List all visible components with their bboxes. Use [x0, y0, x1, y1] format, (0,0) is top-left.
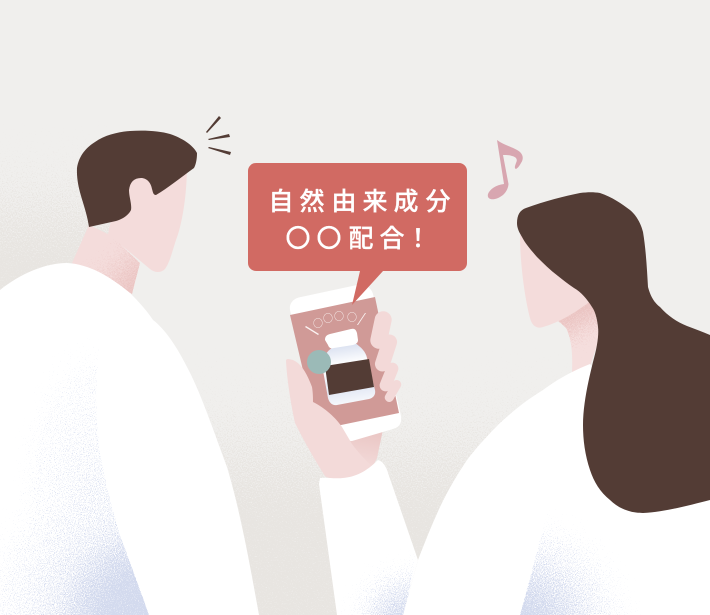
woman neck — [555, 300, 602, 372]
man hair — [77, 131, 197, 227]
hand and phone — [286, 285, 403, 479]
man neck — [72, 225, 140, 294]
woman body — [403, 364, 710, 615]
sleeve shading — [335, 535, 420, 615]
bottle label — [325, 359, 374, 395]
bottle cap — [325, 329, 358, 348]
icon: music note — [488, 140, 523, 199]
bubble text line 1: 自然由来成分 — [268, 188, 451, 216]
man face — [108, 165, 187, 272]
woman hair — [517, 192, 710, 513]
man arm shading: sparse grain — [10, 330, 149, 615]
bubble text line 2: 〇〇配合！ — [285, 225, 431, 253]
speech bubble — [248, 163, 467, 305]
phone body — [290, 285, 401, 441]
thumb and hand — [286, 359, 373, 479]
man arm shading: dense grain — [0, 425, 149, 615]
palm — [340, 425, 384, 470]
woman back shading — [520, 495, 650, 615]
screen heading ○○○○: ○○○○ — [313, 308, 357, 330]
man shoulder and arm — [0, 263, 259, 615]
bubble shape — [248, 163, 467, 305]
sound lines near head — [206, 116, 231, 155]
teal seal — [307, 350, 331, 374]
woman figure — [403, 192, 710, 615]
phone screen — [290, 297, 399, 430]
fingers — [369, 310, 403, 404]
screen heading ○○○○ — [305, 308, 366, 335]
supplement bottle — [322, 329, 375, 405]
sleeve of woman's arm — [319, 460, 420, 615]
man figure — [0, 131, 259, 615]
woman face — [520, 235, 592, 328]
